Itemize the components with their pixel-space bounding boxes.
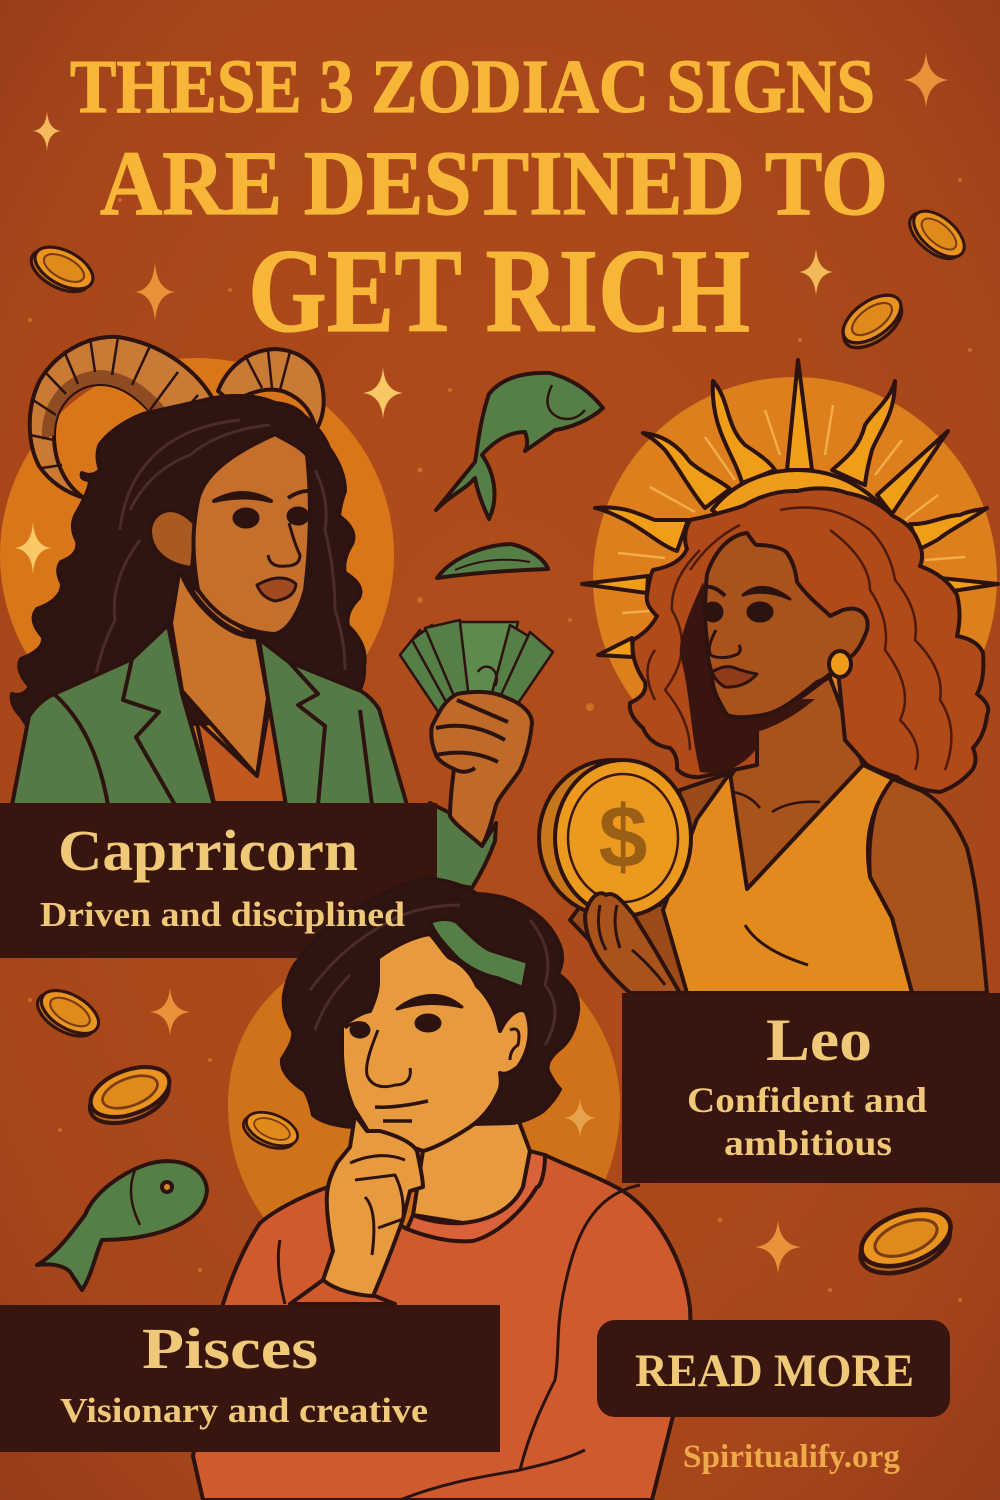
right arm xyxy=(869,779,987,993)
halo star xyxy=(564,1098,596,1138)
panel: Leo xyxy=(622,993,1000,1183)
dress fold xyxy=(745,925,808,965)
sleeve xyxy=(430,803,496,888)
small coin xyxy=(239,1105,302,1156)
coin with dollar xyxy=(539,760,691,916)
figure: Leo woman xyxy=(539,360,998,993)
sleeve cuff xyxy=(290,1280,395,1304)
panel: Pisces: Pisces xyxy=(142,1316,318,1381)
halo xyxy=(0,358,394,752)
sun rays xyxy=(582,360,998,657)
finger lines xyxy=(350,1156,405,1255)
shirt xyxy=(196,701,288,803)
source credit: Spiritualify.org xyxy=(683,1439,901,1475)
panel: Leo: Leo xyxy=(766,1007,872,1073)
sun crown band xyxy=(712,470,895,530)
collarbone xyxy=(733,792,820,812)
collar xyxy=(407,1151,545,1241)
panel: Capricorn background xyxy=(0,803,437,958)
pisces fish small xyxy=(437,544,548,578)
pisces fish bottom xyxy=(37,1161,207,1290)
panel: Leo: Confident and xyxy=(687,1080,927,1120)
facial features xyxy=(345,995,519,1121)
sweater xyxy=(193,1155,690,1500)
decorative stars xyxy=(33,52,949,1274)
face xyxy=(194,434,310,634)
hair xyxy=(12,396,365,730)
halo xyxy=(228,950,620,1301)
under-hair shadow xyxy=(680,582,815,773)
panel: Capricorn text: Caprricorn xyxy=(58,818,358,883)
figure: Pisces person xyxy=(193,878,690,1500)
leaf band xyxy=(430,919,528,988)
panel: Capricorn text: Driven and disciplined xyxy=(40,895,406,934)
hair curls xyxy=(648,508,951,770)
panel: Pisces: Visionary and creative xyxy=(60,1391,428,1430)
hair strands xyxy=(310,905,555,1045)
earring xyxy=(829,651,851,677)
hair strands xyxy=(95,420,345,680)
panel: Capricorn text xyxy=(40,818,406,934)
pisces fish top xyxy=(436,373,603,519)
face xyxy=(705,533,868,717)
hair xyxy=(630,488,988,792)
title: ARE DESTINED TO xyxy=(100,132,888,234)
sun halo xyxy=(593,377,997,781)
lapels xyxy=(123,625,325,805)
title: GET RICH xyxy=(248,224,750,357)
chest and neck xyxy=(730,678,863,889)
hair xyxy=(282,878,578,1127)
title: THESE 3 ZODIAC SIGNS xyxy=(70,45,875,129)
hand xyxy=(323,1115,423,1296)
halo star xyxy=(15,522,51,574)
left arm xyxy=(570,773,730,993)
hand holding coin xyxy=(585,893,680,993)
jacket xyxy=(12,625,214,805)
panel: Pisces xyxy=(0,1305,500,1452)
hand xyxy=(431,692,532,846)
coin with dollar: $ xyxy=(599,787,647,886)
panel: Leo: ambitious xyxy=(724,1123,892,1163)
button: read more xyxy=(597,1320,950,1417)
coins xyxy=(24,201,972,1284)
speckles xyxy=(28,178,972,1302)
facial features xyxy=(704,587,790,687)
face xyxy=(342,934,530,1151)
button: read more: READ MORE xyxy=(635,1345,914,1397)
horns xyxy=(30,337,324,498)
money fan xyxy=(400,620,553,722)
jaw shadow line xyxy=(182,573,280,636)
dress xyxy=(663,765,912,993)
facial features xyxy=(214,491,311,601)
neck xyxy=(171,573,268,776)
neck xyxy=(413,1071,530,1223)
halo light rays xyxy=(618,405,965,613)
sleeve seams xyxy=(278,1185,640,1500)
jacket side seams xyxy=(54,694,372,805)
ear xyxy=(150,510,196,568)
figure: Capricorn woman xyxy=(0,337,553,888)
title xyxy=(70,45,888,357)
